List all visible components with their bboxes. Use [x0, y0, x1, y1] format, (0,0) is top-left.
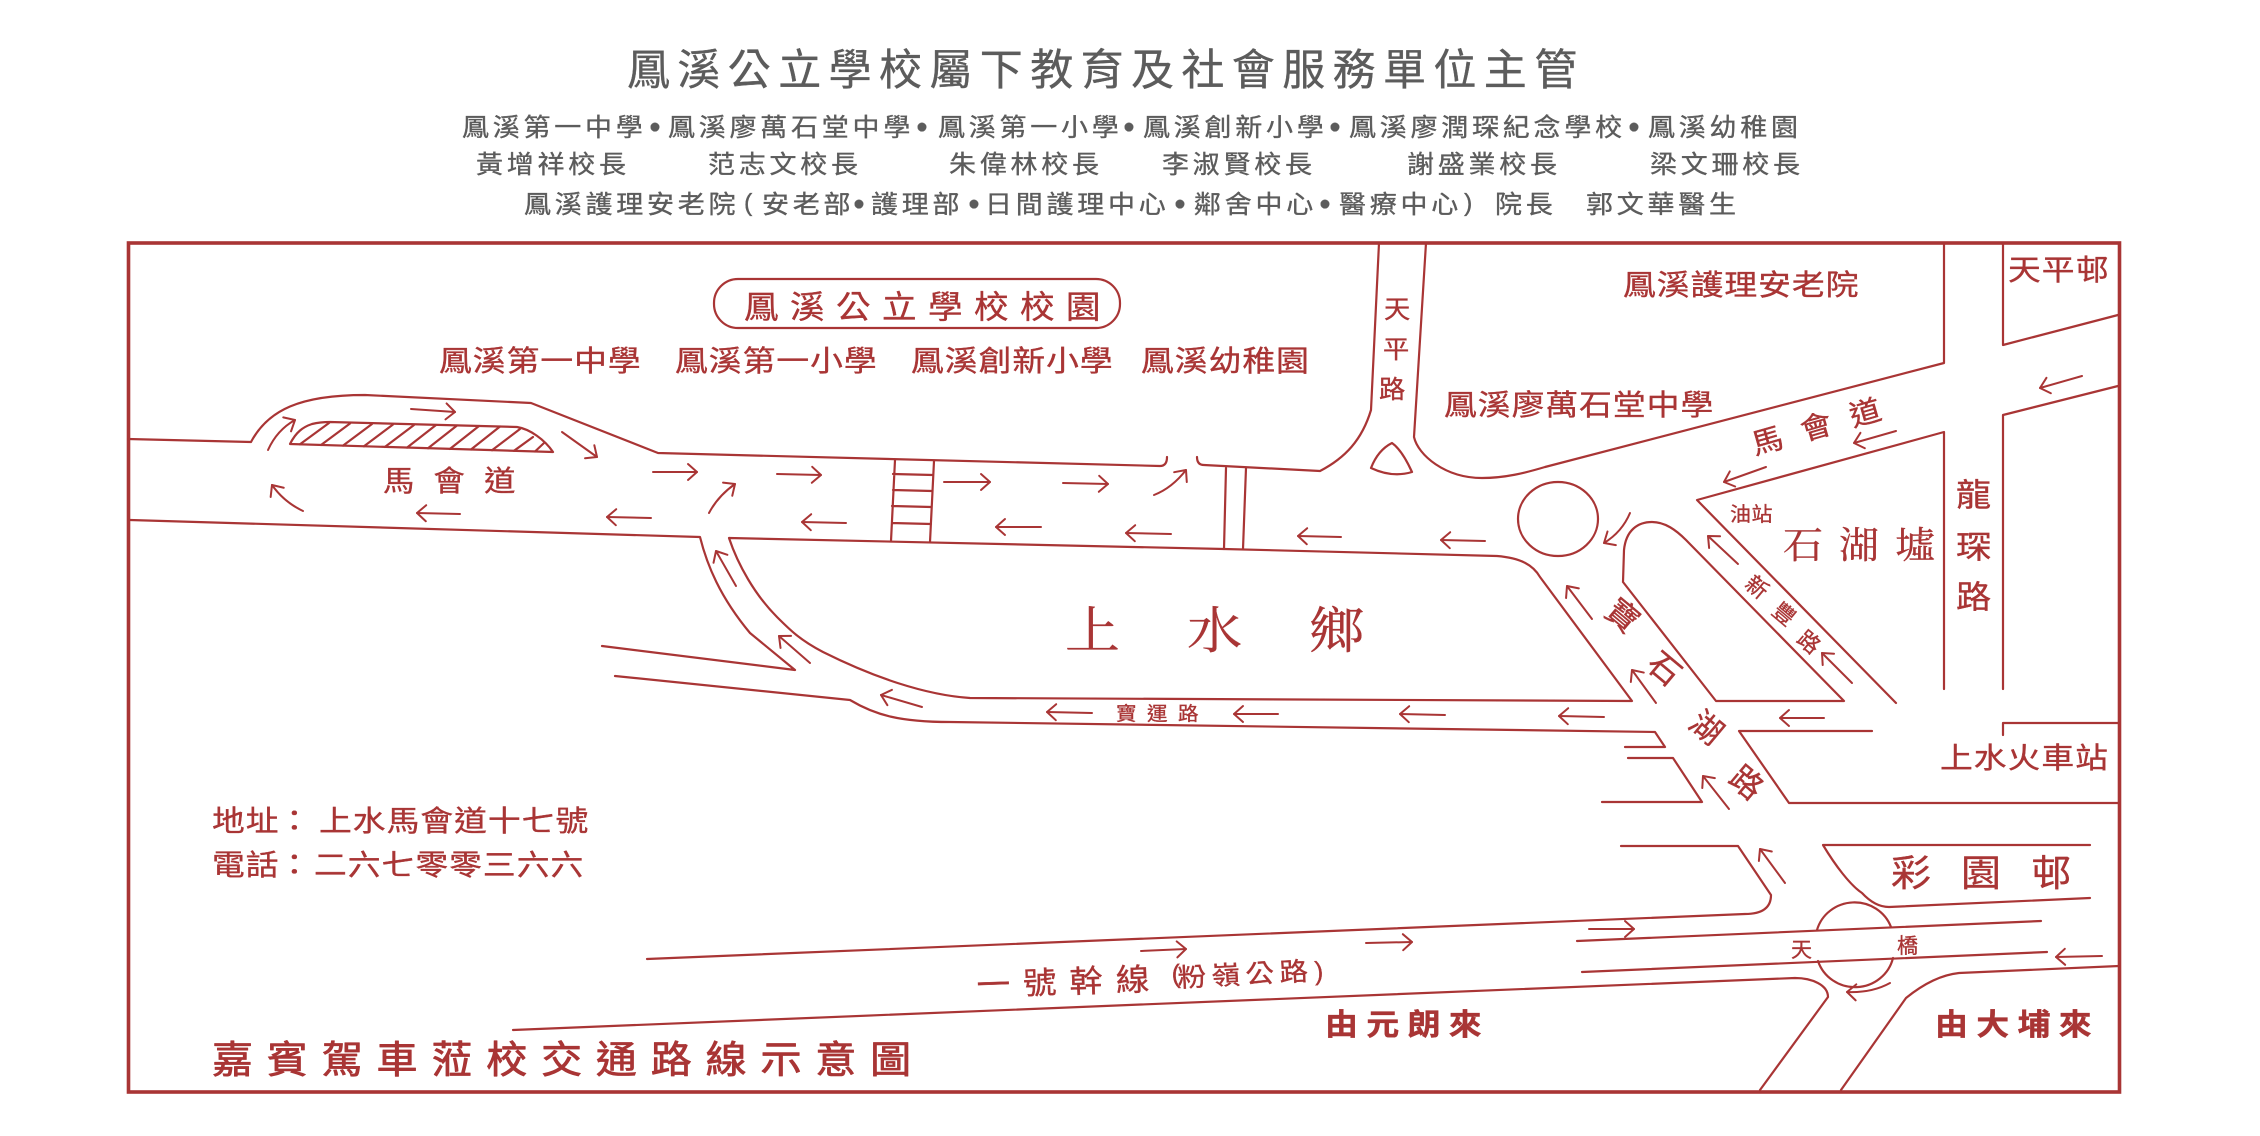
arrow: trunk road 3 [1589, 928, 1634, 930]
map title: 嘉賓駕車蒞校交通路線示意圖 [212, 1039, 925, 1082]
label: Lung Sum Avenue: 路 [1956, 579, 1991, 616]
school names row: • [649, 109, 661, 145]
school names row [462, 109, 1802, 145]
school names row: • [1628, 109, 1640, 145]
arrow: roundabout [1604, 513, 1630, 543]
road network [128, 243, 2119, 1090]
label: Lung Sum Avenue: 琛 [1956, 530, 1991, 566]
nursing home row: 護理部 [871, 190, 963, 219]
school names row: • [1329, 109, 1341, 145]
nursing home row: 院長 [1495, 190, 1557, 219]
address and phone: 電話 [212, 849, 280, 882]
label: Po Shek Wu Road: 寶 [1599, 592, 1646, 640]
label: from Tai Po: 由大埔來 [1935, 1007, 2100, 1042]
label: Lung Sum Avenue: 龍 [1956, 477, 1991, 514]
nursing home row: 醫療中心 [1339, 190, 1462, 219]
arrow: under bridge [1847, 983, 1890, 992]
school names row: 鳳溪第一小學 [938, 113, 1123, 142]
arrow: Po Wan Road 5 [1047, 712, 1092, 713]
label: Choi Yuen Estate: 彩園邨 [1891, 853, 2101, 895]
arrow: Po Shek Wu Road 3 [1703, 776, 1729, 809]
arrow: west 4 [996, 526, 1041, 528]
arrow: turn into campus [1154, 470, 1186, 495]
address and phone: 二六七零零三六六 [314, 849, 584, 882]
arrow: branch lower [779, 636, 810, 663]
arrow: Ma Wui Road 2 [1724, 467, 1766, 482]
label: San Fung Avenue: 路 [1792, 626, 1825, 659]
address and phone: ： [278, 805, 312, 838]
address and phone: ： [278, 849, 312, 882]
campus schools [439, 345, 1310, 378]
label: Po Shek Wu Road: 湖 [1683, 704, 1730, 752]
label: San Fung Avenue: 新 [1740, 571, 1773, 604]
label: Tin Ping Estate: 天平邨 [2008, 254, 2109, 287]
label: Ma Wui Road east: 馬會道 [1748, 388, 1904, 461]
label: Shek Wu Hui: 石湖墟 [1783, 525, 1951, 567]
panel: route map [128, 243, 2120, 1092]
hatched traffic island [290, 422, 553, 452]
label: from Yuen Long: 由元朗來 [1325, 1007, 1490, 1042]
arrow: east 4 [1063, 483, 1108, 484]
campus label pill: 鳳溪公立學校校園 [744, 290, 1112, 326]
campus schools: 鳳溪第一小學 [675, 345, 878, 378]
arrow: Po Wan Road 1 [1780, 717, 1824, 719]
nursing home row: 鳳溪護理安老院 [524, 190, 739, 219]
arrow: west curve [272, 485, 303, 511]
arrow: Po Wan Road 4 [1234, 713, 1278, 715]
arrow: Po Wan Road 3 [1400, 714, 1445, 715]
label: Route 1 trunk road: ( [1171, 959, 1181, 989]
label: Po Shek Wu Road: 石 [1641, 645, 1688, 693]
label: Ma Wui Road west: 馬會道 [383, 465, 535, 498]
address and phone [212, 805, 589, 882]
arrow: Po Shek Wu Road 4 [1760, 849, 1785, 883]
arrow: west 5 [1126, 533, 1171, 534]
arrow: east 3 [944, 481, 990, 483]
arrow: trunk road 1 [1141, 949, 1186, 951]
map frame [128, 243, 2120, 1092]
label: Tin Ping Road [1379, 297, 1410, 404]
label: Route 1 trunk road: ) [1314, 956, 1324, 986]
arrow: east 2 [777, 474, 821, 475]
campus label pill [714, 279, 1120, 328]
principals row: 范志文校長 [708, 150, 862, 179]
nursing home row [524, 186, 1740, 222]
crossing: pedestrian [1224, 468, 1246, 549]
arrow: west 7 [1441, 540, 1485, 541]
traffic direction arrows [268, 376, 2102, 992]
arrow: island top [411, 409, 455, 412]
principals row: 朱偉林校長 [949, 150, 1103, 179]
label: Route 1 trunk road [976, 956, 1324, 1003]
school names row: • [1123, 109, 1135, 145]
school names row: 鳳溪創新小學 [1143, 113, 1328, 142]
arrow: west 2 [607, 517, 651, 518]
label: Po Wan Road: 寶運路 [1116, 704, 1209, 725]
arrow: Po Wan Road 2 [1559, 716, 1604, 717]
principals row: 黃增祥校長 [476, 150, 630, 179]
label: Lung Sum Avenue [1956, 477, 1991, 616]
campus schools: 鳳溪幼稚園 [1141, 345, 1310, 378]
school names row: 鳳溪廖萬石堂中學 [668, 113, 914, 142]
principals row: 李淑賢校長 [1162, 150, 1316, 179]
label: Route 1 trunk road: 一號幹線 [976, 962, 1163, 1003]
arrow: west 1 [417, 513, 460, 514]
nursing home row: 日間護理中心 [985, 190, 1170, 219]
label: nursing home: 鳳溪護理安老院 [1623, 269, 1859, 302]
title: 鳳溪公立學校屬下教育及社會服務單位主管 [627, 47, 1585, 95]
nursing home row: • [968, 186, 980, 222]
label: petrol station: 油站 [1730, 503, 1773, 526]
campus schools: 鳳溪創新小學 [911, 345, 1114, 378]
address and phone: 地址 [212, 805, 280, 838]
nursing home row: 郭文華醫生 [1586, 190, 1740, 219]
arrow: Po Shek Wu Road 1 [1567, 586, 1592, 619]
arrow: Po Shek Wu Road 2 [1632, 670, 1656, 703]
label: footbridge: 橋 [1897, 935, 1918, 958]
principals row: 梁文珊校長 [1650, 150, 1804, 179]
arrow: island right down [562, 432, 597, 457]
label: Po Shek Wu Road [1599, 592, 1770, 807]
label: Tin Ping Road: 路 [1379, 376, 1405, 404]
label: footbridge [1791, 935, 1918, 962]
arrow: up from branch [709, 484, 735, 513]
label: Fung Kai Liu Man Shek Tong: 鳳溪廖萬石堂中學 [1444, 389, 1714, 422]
arrow: west 3 [802, 522, 846, 523]
nursing home row: ( [744, 189, 756, 217]
header block [462, 47, 1804, 222]
arrow: west 6 [1298, 536, 1341, 537]
arrow: Po Wan Road 6 [881, 695, 922, 707]
arrow: east edge [2040, 376, 2082, 388]
principals row [476, 150, 1804, 179]
school names row: • [916, 109, 928, 145]
school names row: 鳳溪第一中學 [462, 113, 647, 142]
arrow: from Tai Po [2056, 956, 2102, 957]
address and phone: 上水馬會道十七號 [319, 805, 589, 838]
label: Route 1 trunk road: 粉嶺公路 [1177, 956, 1314, 993]
arrow: Ma Wui Road 1 [1854, 431, 1896, 443]
arrow: east 1 [653, 471, 697, 473]
nursing home row: 安老部 [762, 190, 854, 219]
campus schools: 鳳溪第一中學 [439, 345, 642, 378]
label: Tin Ping Road: 平 [1383, 337, 1409, 364]
crossing: zebra [891, 460, 934, 542]
label: Tin Ping Road: 天 [1384, 297, 1410, 324]
nursing home row: 鄰舍中心 [1194, 190, 1317, 219]
school names row: 鳳溪廖潤琛紀念學校 [1349, 113, 1626, 142]
arrow: San Fung Avenue upper [1708, 536, 1738, 564]
arrow: San Fung Avenue lower [1822, 653, 1852, 683]
label: San Fung Avenue [1740, 571, 1825, 659]
arrow: trunk road 2 [1366, 942, 1412, 943]
principals row: 謝盛業校長 [1407, 150, 1561, 179]
school names row: 鳳溪幼稚園 [1648, 113, 1802, 142]
label: San Fung Avenue: 豐 [1767, 598, 1800, 631]
arrow: island left up [268, 420, 295, 450]
nursing home row: • [853, 186, 865, 222]
nursing home row: • [1174, 186, 1186, 222]
label: Po Shek Wu Road: 路 [1723, 759, 1770, 807]
label: Sheung Shui station: 上水火車站 [1940, 742, 2109, 775]
arrow: branch upper [716, 551, 736, 586]
nursing home row: • [1319, 186, 1331, 222]
label: footbridge: 天 [1791, 939, 1812, 962]
nursing home row: ) [1464, 189, 1476, 217]
label: Sheung Shui Heung: 上水鄉 [1065, 604, 1431, 659]
